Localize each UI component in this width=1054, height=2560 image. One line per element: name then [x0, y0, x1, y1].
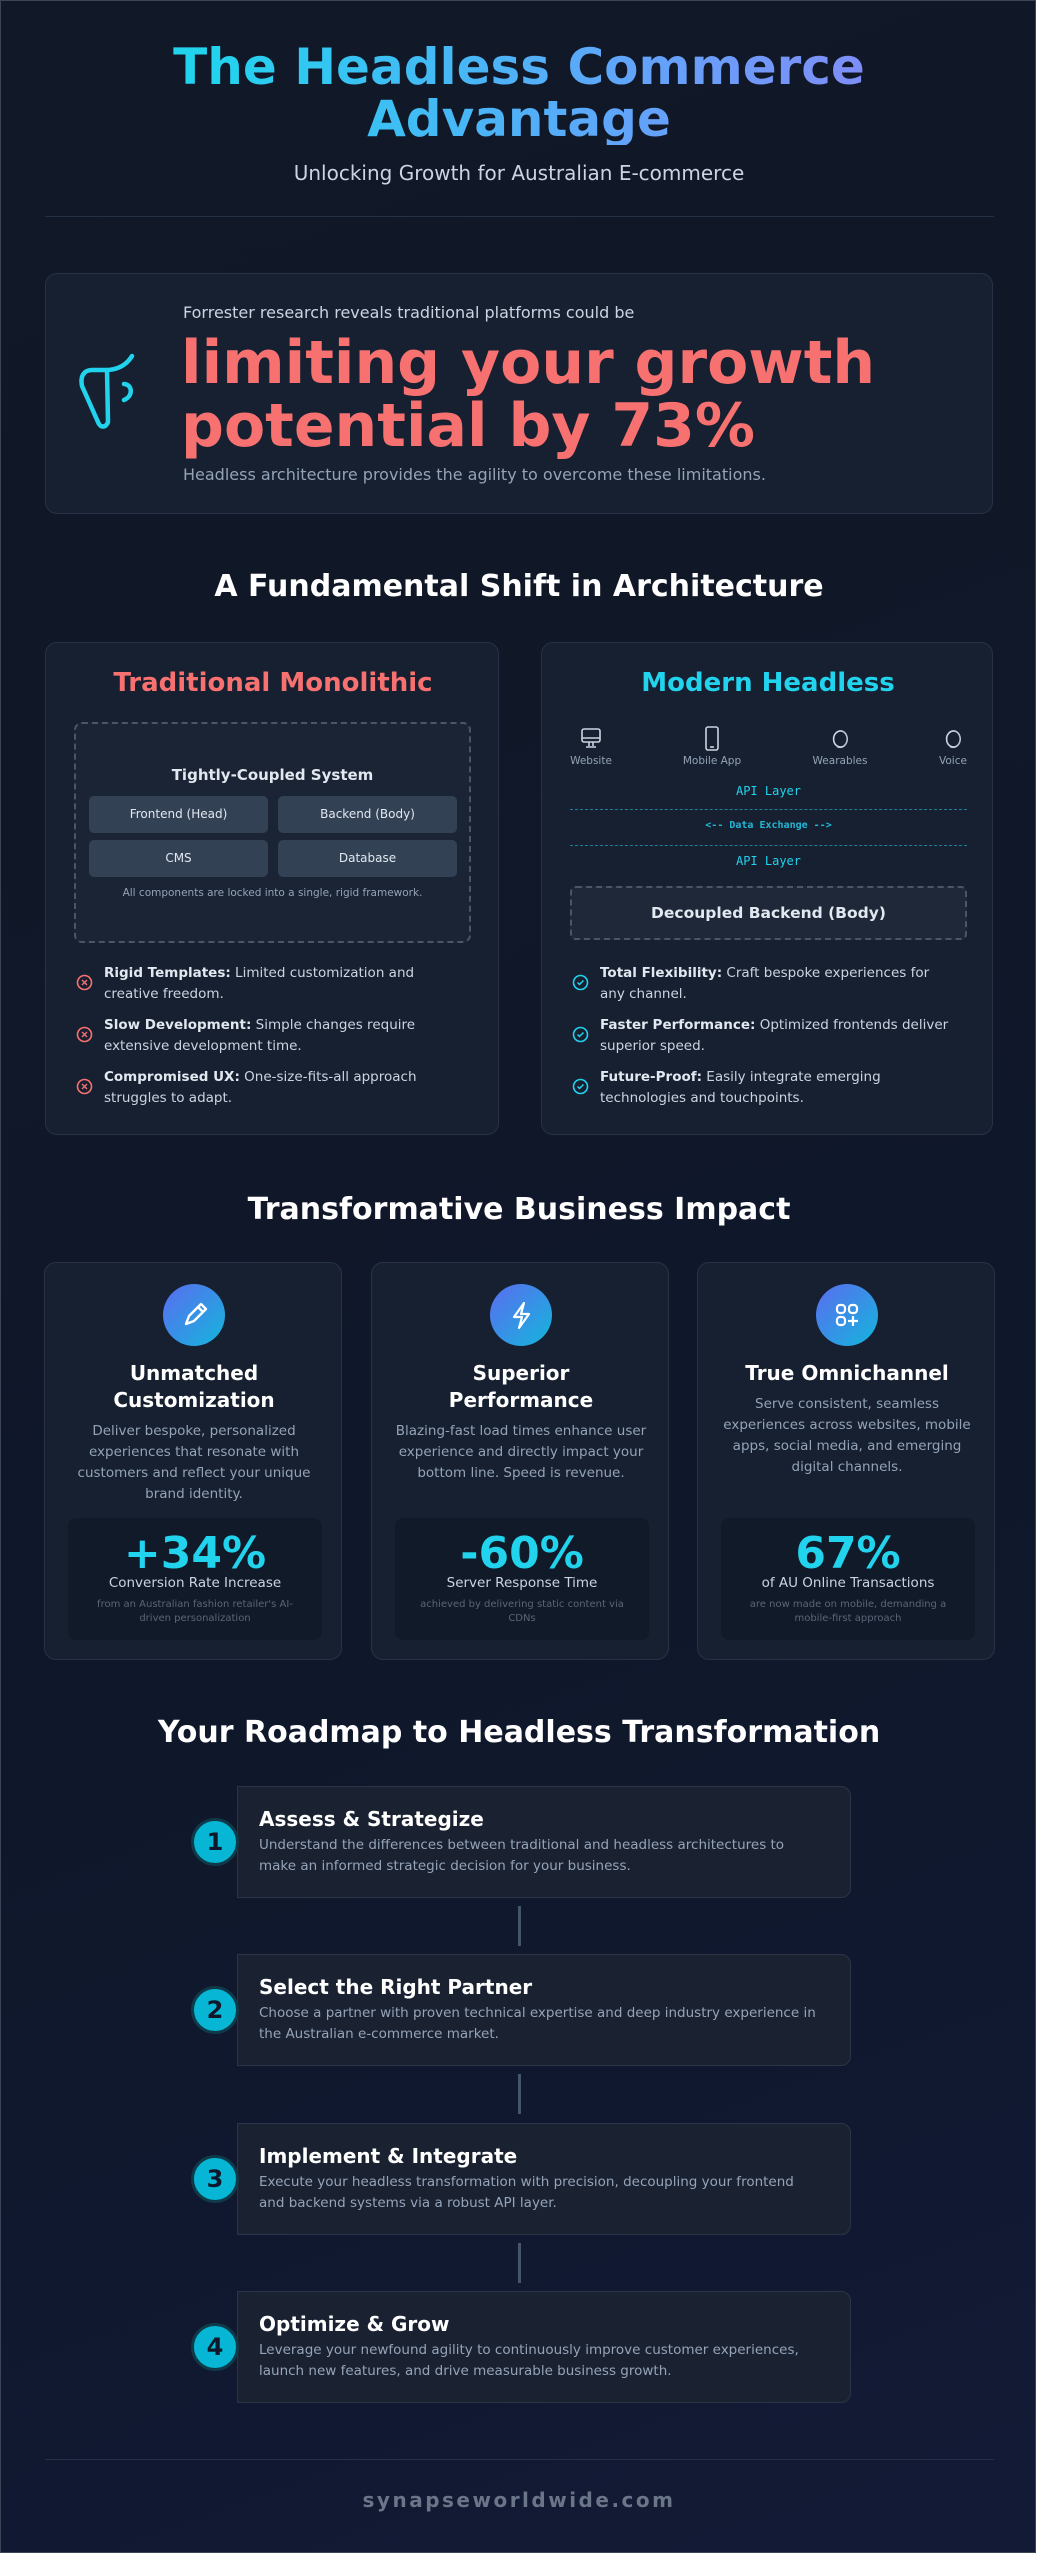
decoupled backend box: Decoupled Backend (Body)	[651, 904, 886, 922]
title: Advantage	[367, 90, 671, 148]
stat: conversion	[68, 1518, 322, 1640]
connector 2	[518, 2074, 521, 2114]
card: omnichannel: True Omnichannel	[745, 1361, 949, 1385]
list: drawbacks: Slow Development: Simple changes require extensive development time.	[104, 1017, 415, 1054]
card: performance	[371, 1262, 669, 1660]
channels icons: Wearables	[813, 755, 867, 767]
card: omnichannel	[697, 1262, 995, 1660]
icon: lightning	[490, 1284, 552, 1346]
step 2	[237, 1954, 851, 2066]
step 3: Execute your headless transformation with precision, decoupling your frontend and backend systems via a robust API layer.	[259, 2174, 794, 2211]
stat: mobile transactions: 67%	[795, 1528, 901, 1579]
diagram: tightly coupled: Database	[339, 851, 396, 865]
card: performance: Blazing-fast load times enhance user experience and directly impact your bottom line. Speed is revenue.	[396, 1423, 646, 1481]
step 1	[237, 1786, 851, 1898]
step 4: Leverage your newfound agility to continuously improve customer experiences, launch new features, and drive measurable business growth.	[259, 2342, 799, 2379]
stat: response time: achieved by delivering static content via CDNs	[420, 1599, 624, 1624]
text: big stat	[181, 328, 875, 461]
stat: response time	[395, 1518, 649, 1640]
diagram: tightly coupled: Frontend (Head)	[130, 807, 227, 821]
list: benefits: Total Flexibility: Craft bespoke experiences for any channel.	[600, 965, 929, 1002]
list: drawbacks: Rigid Templates: Limited customization and creative freedom.	[104, 965, 414, 1002]
stat: response time: Server Response Time	[447, 1575, 597, 1591]
stat: mobile transactions	[721, 1518, 975, 1640]
channels icons: Mobile App	[683, 755, 741, 767]
step 1 number: 1	[207, 1828, 223, 1856]
title: The Headless Commerce	[173, 38, 865, 96]
step 4: Optimize & Grow	[259, 2312, 450, 2336]
panel: key statistic	[45, 273, 993, 514]
step 3 number	[191, 2155, 239, 2203]
card: performance: Superior	[473, 1361, 569, 1385]
diagram: tightly coupled: CMS	[165, 851, 192, 865]
step 3: Implement & Integrate	[259, 2144, 517, 2168]
diagram: tightly coupled: All components are locked into a single, rigid framework.	[123, 887, 422, 899]
subtitle: Unlocking Growth for Australian E-commerce	[294, 161, 744, 185]
step 1: Assess & Strategize	[259, 1807, 484, 1831]
connector 1	[518, 1906, 521, 1946]
step 1: Understand the differences between traditional and headless architectures to make an informed strategic decision for your business.	[259, 1837, 784, 1874]
card title: Traditional Monolithic	[113, 668, 433, 698]
stat: conversion: from an Australian fashion retailer's AI-driven personalization	[97, 1599, 293, 1624]
text: big stat: limiting your growth	[181, 328, 875, 398]
footer: synapseworldwide.com	[363, 2488, 675, 2512]
stat: mobile transactions: are now made on mobile, demanding a mobile-first approach	[750, 1599, 946, 1624]
api layer diagram: API Layer	[736, 854, 801, 868]
step 2: Select the Right Partner	[259, 1975, 532, 1999]
card: customization: Customization	[113, 1388, 275, 1412]
step 2: Choose a partner with proven technical expertise and deep industry experience in the Australian e-commerce market.	[259, 2005, 816, 2042]
panel: traditional monolithic	[45, 642, 499, 1135]
heading: architecture: A Fundamental Shift in Architecture	[214, 569, 824, 604]
diagram: tightly coupled	[74, 722, 471, 943]
card: customization: Unmatched	[130, 1361, 258, 1385]
list: benefits	[572, 965, 948, 1106]
list: benefits: Future-Proof: Easily integrate emerging technologies and touchpoints.	[600, 1069, 881, 1106]
step 1 number	[191, 1818, 239, 1866]
card: performance: Performance	[449, 1388, 593, 1412]
list: benefits: Faster Performance: Optimized frontends deliver superior speed.	[600, 1017, 948, 1054]
step 2 number: 2	[207, 1996, 223, 2024]
step 3 number: 3	[207, 2165, 223, 2193]
channels icons: Voice	[939, 755, 967, 767]
text: note: Headless architecture provides the agility to overcome these limitations.	[183, 465, 766, 484]
step 4	[237, 2291, 851, 2403]
step 2 number	[191, 1986, 239, 2034]
api layer diagram: <-- Data Exchange -->	[705, 820, 832, 831]
icon: megaphone	[79, 354, 134, 429]
channels icons: Website	[570, 755, 612, 767]
icon: pencil	[163, 1284, 225, 1346]
list: drawbacks: Compromised UX: One-size-fits-all approach struggles to adapt.	[104, 1069, 417, 1106]
decoupled backend box	[570, 886, 967, 940]
channels icons	[570, 726, 967, 767]
list: drawbacks	[76, 965, 417, 1106]
heading: roadmap: Your Roadmap to Headless Transformation	[158, 1715, 880, 1750]
card title: Modern Headless	[641, 668, 895, 698]
api layer diagram: API Layer	[736, 784, 801, 798]
icon: apps	[816, 1284, 878, 1346]
stat: conversion: +34%	[124, 1528, 266, 1579]
title	[1, 41, 1037, 145]
card: customization	[44, 1262, 342, 1660]
card: customization: Deliver bespoke, personalized experiences that resonate with customers and reflect your unique brand identity.	[78, 1423, 310, 1502]
text: big stat: potential by 73%	[181, 391, 755, 461]
text: intro: Forrester research reveals traditional platforms could be	[183, 303, 634, 322]
card: omnichannel: Serve consistent, seamless experiences across websites, mobile apps, social media, and emerging digital channels.	[723, 1396, 971, 1475]
stat: conversion: Conversion Rate Increase	[109, 1575, 281, 1591]
stat: response time: -60%	[460, 1528, 584, 1579]
stat: mobile transactions: of AU Online Transactions	[762, 1575, 934, 1591]
connector 3	[518, 2243, 521, 2283]
step 3	[237, 2123, 851, 2235]
diagram: tightly coupled: Backend (Body)	[320, 807, 415, 821]
diagram: tightly coupled: Tightly-Coupled System	[172, 766, 373, 784]
panel: modern headless	[541, 642, 993, 1135]
heading: business impact: Transformative Business Impact	[248, 1192, 790, 1227]
step 4 number: 4	[207, 2333, 223, 2361]
api layer diagram	[570, 784, 967, 868]
step 4 number	[191, 2323, 239, 2371]
